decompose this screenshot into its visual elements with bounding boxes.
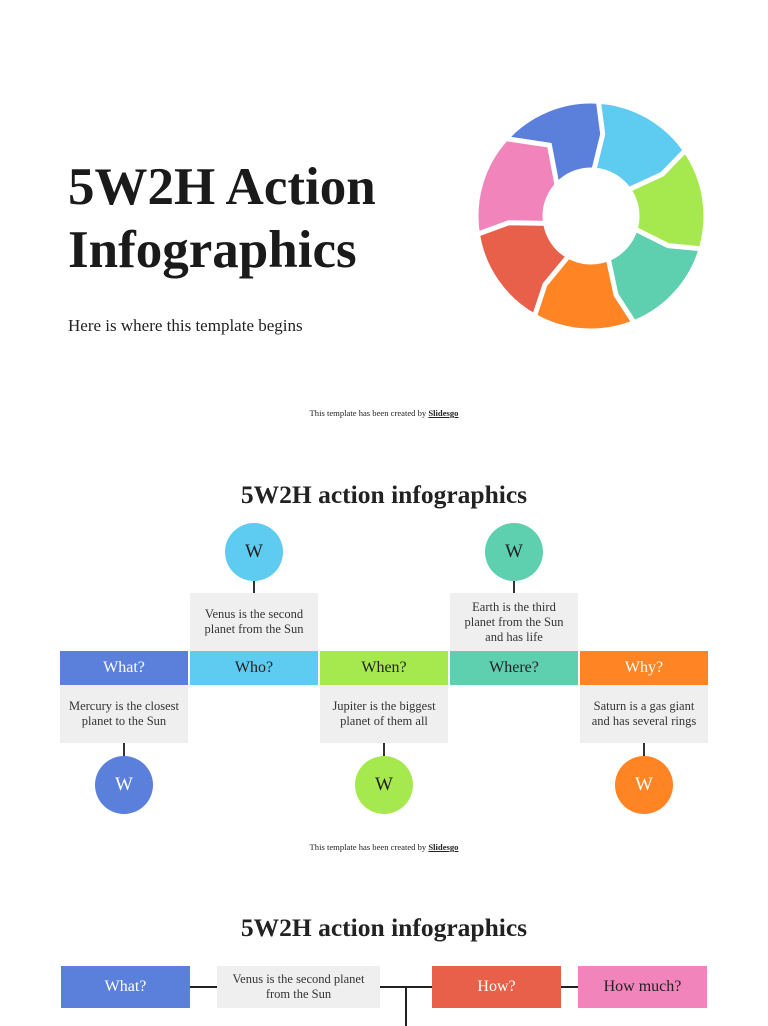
- text: why: [580, 685, 708, 743]
- label: Who?: Who?: [235, 659, 273, 676]
- text: when: [320, 685, 448, 743]
- label: How much?: How much?: [604, 978, 681, 995]
- label: Why?: [580, 651, 708, 685]
- credit: This template has been created by Slidesgo: [310, 842, 458, 852]
- text: venus: [217, 966, 380, 1008]
- text: who: [190, 593, 318, 651]
- label: Where?: [450, 651, 578, 685]
- icon: W circle teal: W: [505, 541, 523, 562]
- label: When?: [320, 651, 448, 685]
- text: when: planet of them all: [340, 714, 428, 728]
- label: Who?: [190, 651, 318, 685]
- icon: W circle blue: [95, 756, 153, 814]
- text: what: Mercury is the closest: [69, 699, 179, 713]
- text: where: [450, 593, 578, 651]
- label: How much?: [578, 966, 707, 1008]
- text: venus: from the Sun: [266, 987, 331, 1001]
- icon: W circle teal: [485, 523, 543, 581]
- panel: 5W timeline: [60, 523, 708, 814]
- icon: W circle green: W: [375, 774, 393, 795]
- text: what: [60, 685, 188, 743]
- credit: This template has been created by Slidesgo: [310, 408, 458, 418]
- heading: section 3: 5W2H action infographics: [241, 913, 527, 942]
- label: Where?: Where?: [489, 659, 539, 676]
- title: Infographics: [68, 221, 357, 279]
- text: who: planet from the Sun: [205, 622, 303, 636]
- icon: W circle cyan: [225, 523, 283, 581]
- text: where: and has life: [485, 630, 543, 644]
- title: [68, 158, 376, 279]
- text: venus: Venus is the second planet: [233, 972, 364, 986]
- icon: W circle cyan: W: [245, 541, 263, 562]
- label: What?: What?: [103, 659, 145, 676]
- icon: W circle orange: [615, 756, 673, 814]
- icon: W circle green: [355, 756, 413, 814]
- icon: cycle ring: [478, 104, 704, 328]
- label: How?: How?: [477, 978, 516, 995]
- text: where: planet from the Sun: [465, 614, 563, 628]
- icon: W circle orange: W: [635, 774, 653, 795]
- panel: flow diagram: [61, 966, 707, 1026]
- title: 5W2H Action: [68, 158, 376, 216]
- heading: section 2: 5W2H action infographics: [241, 480, 527, 509]
- label: How?: [432, 966, 561, 1008]
- label: What?: What?: [105, 978, 146, 995]
- label: What?: [60, 651, 188, 685]
- label: Why?: Why?: [625, 659, 663, 676]
- text: when: Jupiter is the biggest: [332, 699, 436, 713]
- icon: W circle blue: W: [115, 774, 133, 795]
- label: What?: [61, 966, 190, 1008]
- text: where: Earth is the third: [472, 600, 556, 614]
- text: who: Venus is the second: [205, 607, 303, 621]
- subtitle: Here is where this template begins: [68, 316, 303, 335]
- text: why: Saturn is a gas giant: [594, 699, 694, 713]
- text: what: planet to the Sun: [82, 714, 166, 728]
- text: why: and has several rings: [592, 714, 696, 728]
- label: When?: When?: [361, 659, 407, 676]
